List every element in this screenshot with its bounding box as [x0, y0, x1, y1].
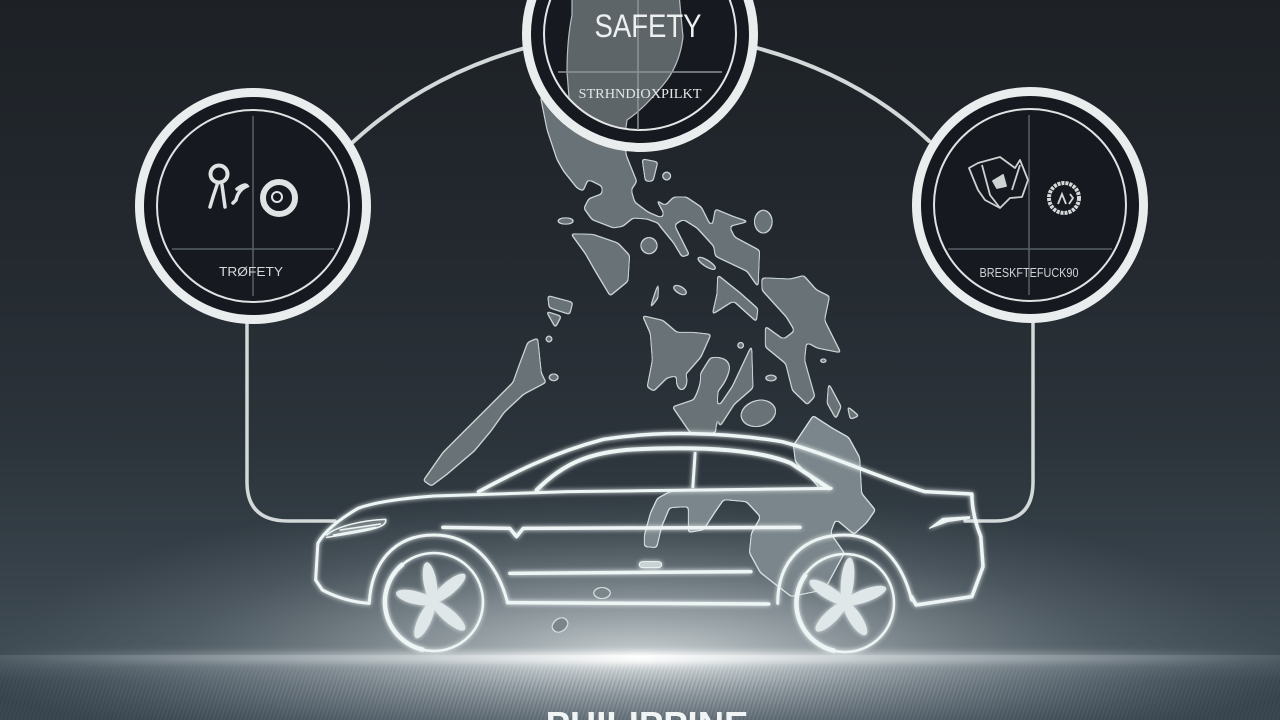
car: pillar — [693, 453, 695, 487]
heading: safety: SAFETY — [594, 8, 702, 44]
map: Guimaras — [676, 371, 687, 390]
car: windows — [537, 448, 829, 490]
car: nose and beltline — [316, 488, 831, 603]
floor with horizon light — [0, 652, 1280, 720]
car: front wheel — [385, 553, 483, 651]
map: southern specks — [549, 587, 611, 636]
label: right circle: BRESKFTEFUCK90 — [980, 265, 1078, 280]
car: rear wheel — [796, 554, 894, 652]
map: Calamian islands — [545, 295, 573, 329]
map: scattered islets — [545, 158, 860, 420]
map: Bohol — [737, 396, 779, 431]
map: Catanduanes — [754, 210, 773, 234]
map: Cebu — [718, 343, 753, 428]
map: Negros — [672, 357, 730, 433]
label: left circle: TRØFETY — [219, 264, 283, 279]
car: sill — [508, 603, 769, 604]
car outline — [316, 434, 983, 652]
map inside top circle — [567, 0, 683, 135]
label: top circle: STRHNDIOXPILKT — [578, 87, 702, 102]
car: tail light — [929, 517, 970, 528]
map of the Philippines — [423, 97, 860, 487]
car: shoulder line — [443, 527, 800, 537]
connector lines between circles and car — [247, 48, 1033, 521]
icon: wheel — [263, 182, 295, 214]
map: Masbate — [712, 274, 758, 323]
icon: person — [210, 166, 247, 207]
map: Mindoro — [570, 233, 630, 297]
map: Samar — [762, 275, 842, 353]
map: Leyte — [765, 325, 815, 405]
car: door line — [510, 572, 751, 573]
map: Panay — [642, 315, 712, 392]
map: Bicol — [655, 197, 760, 288]
circle: top — [526, 0, 754, 148]
car: front arch — [369, 535, 508, 603]
car: roof and rear — [479, 434, 983, 605]
map: Mindanao — [549, 415, 876, 636]
icon: shield shards — [969, 157, 1028, 208]
map: Palawan — [423, 337, 547, 487]
map: Luzon — [540, 97, 662, 228]
car: headlight — [327, 519, 386, 537]
map: Marinduque — [640, 237, 658, 254]
circle: left — [140, 92, 366, 320]
car: door handle — [639, 562, 662, 568]
car: rear arch — [778, 535, 912, 603]
icon: badge — [1049, 183, 1079, 213]
circle: right — [916, 92, 1144, 318]
